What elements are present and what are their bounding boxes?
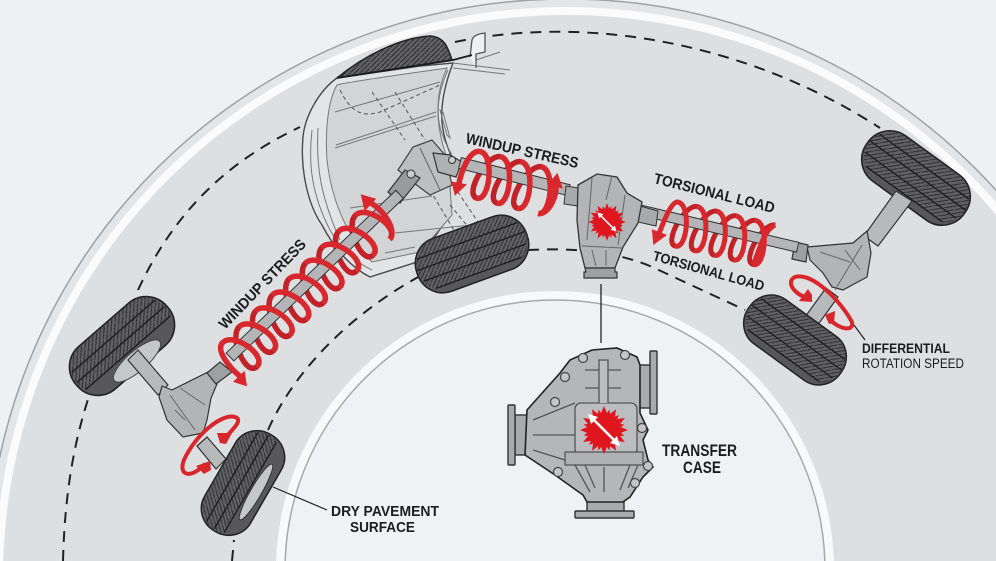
label: differential rotation speed — [862, 341, 964, 371]
label: differential rotation speed: ROTATION SPEED — [862, 356, 964, 371]
left rear axle — [128, 350, 232, 469]
label: transfer case: CASE — [683, 459, 721, 477]
front right tire — [408, 208, 536, 300]
label: dry pavement surface — [331, 504, 439, 536]
leader: differential — [854, 325, 865, 340]
label: torsional load upper: TORSIONAL LOAD — [652, 170, 777, 217]
dashed wheel paths — [63, 32, 880, 561]
transfer case on drivetrain — [564, 174, 658, 278]
lower right wheel — [733, 285, 857, 395]
upper left wheel — [58, 286, 186, 406]
side mirror — [470, 33, 485, 68]
rotation arrow right — [791, 276, 852, 328]
label: windup stress center: WINDUP STRESS — [464, 130, 580, 172]
leader: transfer case — [600, 284, 602, 343]
right rear axle — [792, 191, 912, 326]
label: dry pavement surface: SURFACE — [350, 520, 415, 536]
front left tire — [337, 36, 452, 78]
front axle housing — [388, 140, 462, 203]
rotation arrow left — [182, 417, 238, 474]
label: torsional load lower: TORSIONAL LOAD — [651, 247, 766, 294]
label: differential rotation speed: DIFFERENTIAL — [862, 341, 950, 356]
transfer case detail — [508, 348, 657, 518]
label: transfer case — [662, 442, 737, 477]
spring: windup stress center — [448, 147, 573, 222]
car body — [302, 52, 510, 277]
upper right wheel — [851, 120, 981, 236]
label: windup stress left: WINDUP STRESS — [216, 236, 310, 333]
spring: torsional load — [633, 194, 801, 277]
leader: dry pavement — [273, 487, 327, 510]
spring: windup stress left — [200, 175, 422, 391]
lower left wheel — [192, 421, 294, 545]
label: dry pavement surface: DRY PAVEMENT — [331, 504, 439, 520]
label: transfer case: TRANSFER — [662, 442, 737, 460]
